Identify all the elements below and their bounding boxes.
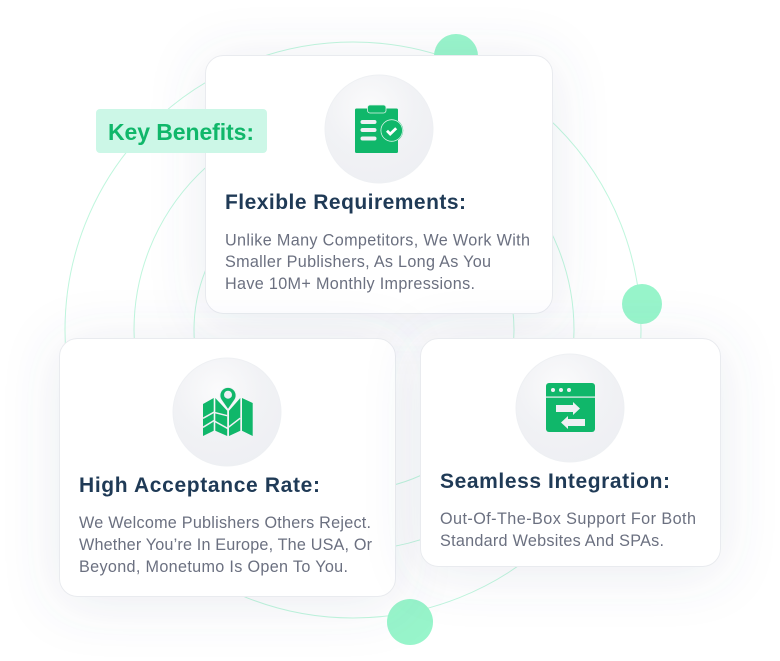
body text: We Welcome Publishers Others Reject. — [79, 514, 371, 532]
icon: clipboard with check — [325, 75, 433, 183]
green dot: bottom — [387, 599, 433, 645]
panel: seamless integration — [420, 338, 720, 566]
body text — [225, 232, 530, 293]
heading: Seamless Integration: — [440, 470, 670, 493]
key benefits badge — [96, 109, 267, 153]
green dot: top — [434, 34, 478, 78]
heading: High Acceptance Rate: — [79, 474, 320, 497]
body text: Beyond, Monetumo Is Open To You. — [79, 558, 348, 576]
body text — [79, 514, 373, 576]
body text: Smaller Publishers, As Long As You — [225, 253, 491, 271]
body text: Standard Websites And SPAs. — [440, 532, 664, 550]
body text — [440, 510, 696, 550]
body text: Out-Of-The-Box Support For Both — [440, 510, 696, 528]
icon: browser window with arrows — [516, 354, 624, 462]
panel: high acceptance rate — [60, 338, 396, 596]
green dot: right — [622, 284, 662, 324]
panel: flexible requirements — [206, 56, 552, 314]
icon: map with pin — [173, 358, 281, 466]
body text: Whether You’re In Europe, The USA, Or — [79, 536, 373, 554]
body text: Unlike Many Competitors, We Work With — [225, 232, 530, 250]
heading: Flexible Requirements: — [225, 191, 466, 214]
concentric rings — [65, 42, 641, 618]
body text: Have 10M+ Monthly Impressions. — [225, 275, 475, 293]
key benefits badge: Key Benefits: — [108, 119, 254, 145]
